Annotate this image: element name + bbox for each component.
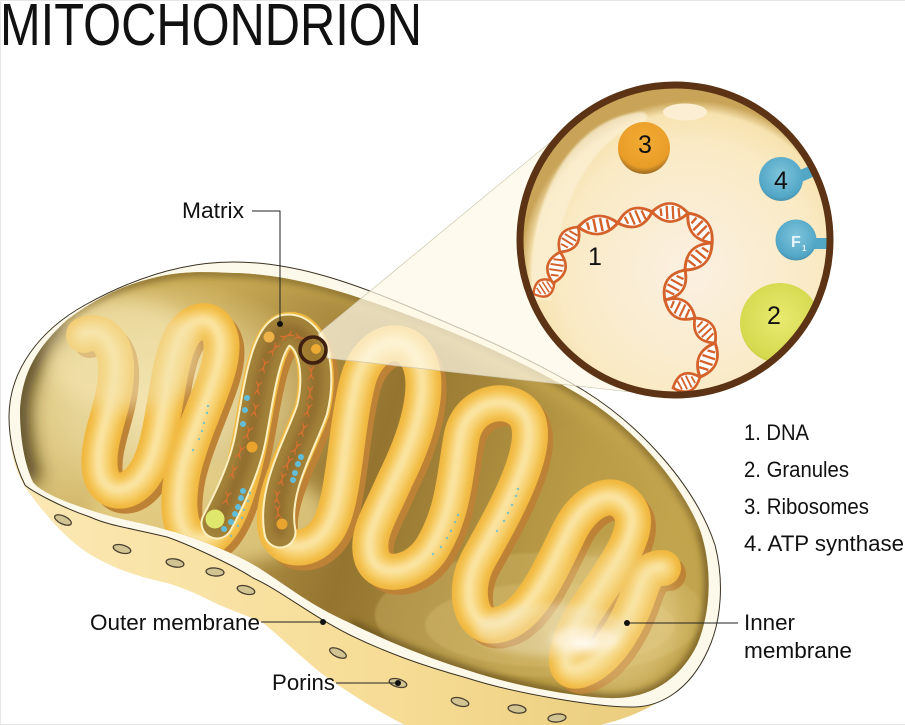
Inner membrane label: Inner: [744, 610, 795, 635]
small ribosomes and granule: [206, 332, 288, 530]
granule 2: [740, 283, 814, 361]
zoom circle: [520, 85, 830, 396]
zoom numbers: 3: [638, 131, 652, 159]
legend: [744, 420, 904, 556]
crescent highlight: [531, 112, 648, 300]
ribosome 3: [618, 122, 670, 174]
small zoom ring: [300, 337, 326, 363]
bright reflection lower right: [475, 604, 625, 656]
legend: 3. Ribosomes: [744, 494, 869, 519]
small DNA inside fold: [223, 331, 314, 519]
cristae tube (inner membrane): [84, 321, 663, 671]
Outer membrane label: Outer membrane: [90, 610, 260, 635]
F1 label: F: [791, 234, 801, 251]
zoom numbers: 4: [774, 167, 788, 195]
Porins label: Porins: [272, 670, 335, 695]
circle ring: [520, 85, 830, 395]
pale wash over last folds: [540, 550, 680, 690]
zoom cone edges: [318, 140, 640, 393]
porins: [53, 513, 566, 723]
pale left glow: [37, 292, 298, 496]
Inner membrane label: membrane: [744, 638, 852, 663]
cristae tube shadow: [90, 327, 669, 677]
zoom cone: [318, 140, 640, 393]
interior cavity: [20, 272, 709, 698]
ATP synthase 4: [759, 157, 815, 201]
Porins label: [272, 670, 401, 695]
mitochondrion organelle: [0, 240, 730, 725]
cristae tube body: [83, 320, 663, 671]
Matrix label: [182, 198, 283, 327]
ATP synthase F1: [776, 220, 828, 260]
lower left glow: [90, 465, 330, 565]
lower right dark edge: [350, 530, 709, 698]
DNA strand: [529, 203, 723, 396]
legend: 1. DNA: [744, 420, 809, 445]
small highlight: [663, 104, 707, 120]
lower right pale swirls: [375, 553, 705, 677]
outer wall with porins: [9, 417, 708, 725]
cut fold: matrix channel: [217, 330, 316, 532]
F1 label: [791, 234, 807, 253]
left dark edge: [20, 320, 67, 482]
small ATP synthase dots: [192, 395, 519, 555]
zoom numbers: [588, 131, 788, 330]
Matrix label: Matrix: [182, 198, 244, 223]
circle fill: [520, 85, 830, 395]
legend: 4. ATP synthase: [744, 531, 904, 556]
zoom numbers: 1: [588, 243, 602, 271]
legend: 2. Granules: [744, 457, 849, 482]
outer membrane rim: [9, 262, 720, 707]
Inner membrane label: [624, 610, 852, 663]
thin top edge: [67, 272, 700, 530]
zoom numbers: 2: [767, 302, 781, 330]
pale wash over hook and first fold: [45, 300, 205, 410]
F1 label: 1: [802, 244, 807, 253]
upper band shading: [113, 272, 699, 527]
